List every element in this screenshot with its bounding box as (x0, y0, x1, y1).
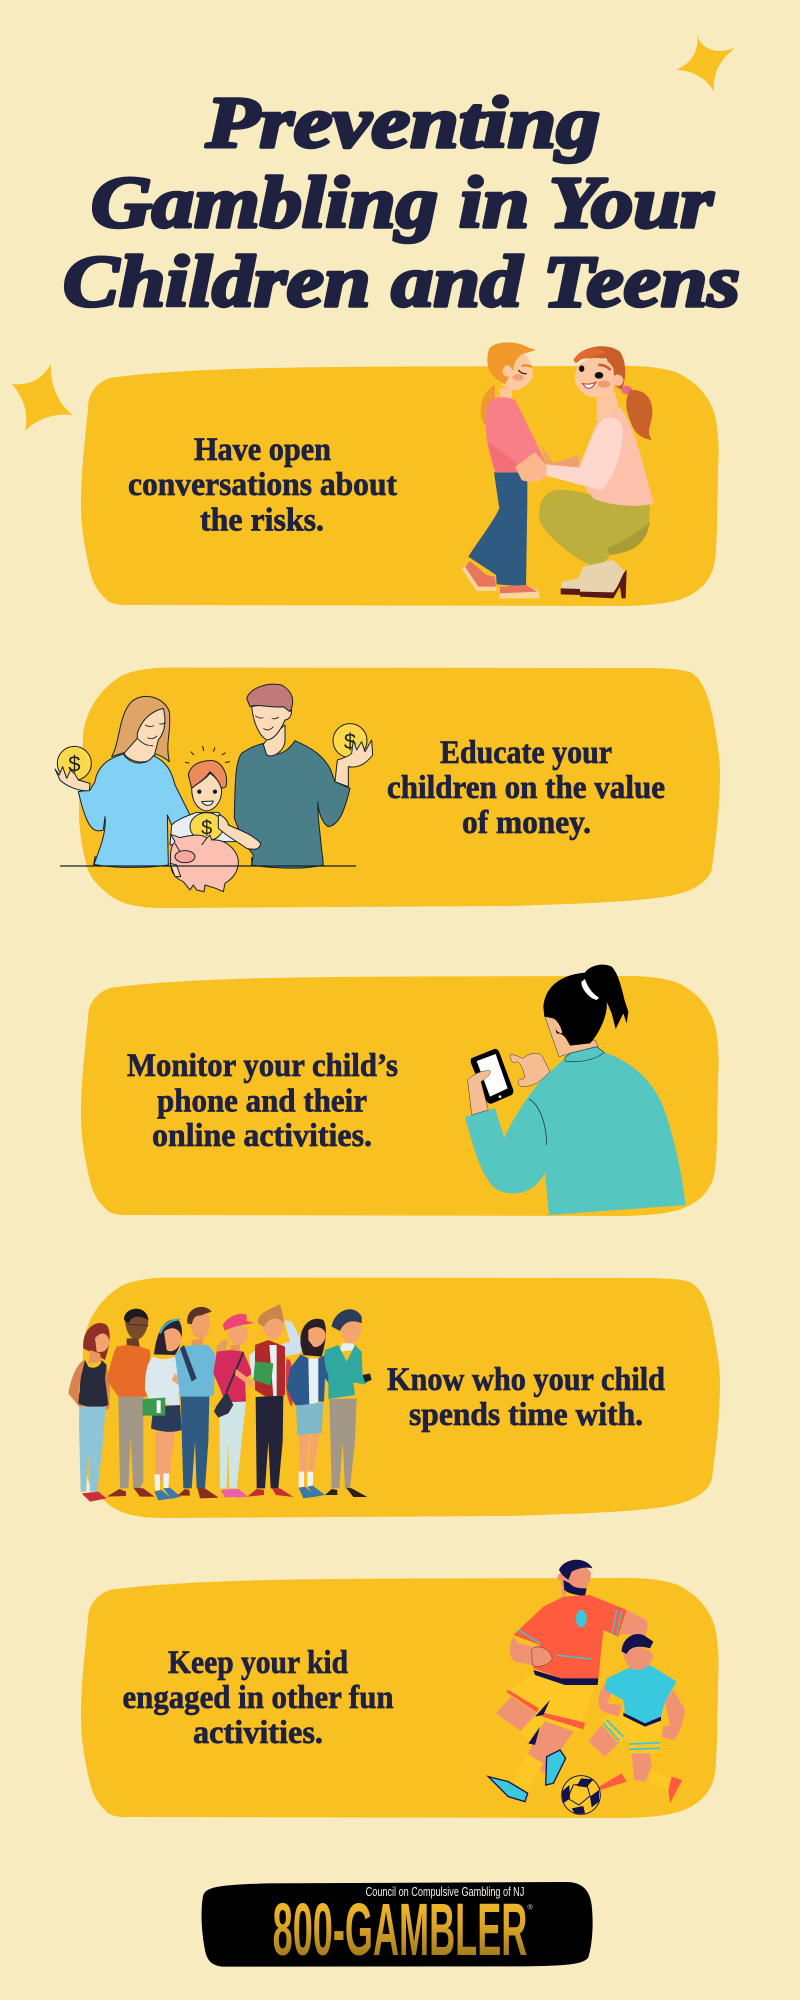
panel: other fun activities (81, 1560, 719, 1818)
text: monitor your child's phone (127, 1048, 398, 1154)
title (63, 82, 740, 322)
text: educate your children: children on the value (387, 770, 665, 806)
text: have open conversations: conversations about (128, 467, 397, 503)
title: Children and Teens (63, 241, 740, 322)
panel background (81, 976, 719, 1216)
panel background (81, 1578, 719, 1818)
text: know who your child: spends time with. (409, 1397, 643, 1433)
panel background (79, 1278, 720, 1518)
text: keep your kid engaged: activities. (193, 1715, 323, 1751)
icon: sparkle star left (12, 364, 73, 431)
text: know who your child: Know who your child (387, 1362, 665, 1398)
text: know who your child (387, 1362, 665, 1433)
text: monitor your child's phone: online activities. (152, 1118, 372, 1154)
panel background (79, 668, 720, 908)
text: keep your kid engaged: Keep your kid (168, 1645, 348, 1681)
text: keep your kid engaged (122, 1645, 394, 1751)
logo tagline: Council on Compulsive Gambling of NJ (366, 1885, 524, 1899)
illustration: mother and daughter (462, 342, 654, 598)
logo: 800-GAMBLER (202, 1882, 593, 1971)
text: educate your children: of money. (462, 805, 591, 841)
illustration: family with piggy bank: $ (201, 817, 212, 839)
text: educate your children (387, 735, 665, 841)
panel background (81, 366, 719, 606)
illustration: family with piggy bank: $ (68, 752, 80, 777)
text: have open conversations: the risks. (200, 502, 324, 538)
panel: know who your child spends time with (68, 1278, 720, 1518)
panel: monitor phone (81, 965, 719, 1216)
illustration: person using phone (465, 965, 686, 1215)
registered mark: ® (527, 1902, 533, 1911)
text: monitor your child's phone: Monitor your child’s (127, 1048, 398, 1084)
logo background (202, 1882, 593, 1967)
text: keep your kid engaged: engaged in other fun (122, 1680, 394, 1716)
title: Preventing (205, 82, 600, 163)
illustration: group of teens (68, 1304, 372, 1502)
text: educate your children: Educate your (440, 735, 612, 771)
panel: open conversations (81, 342, 719, 606)
text: have open conversations: Have open (194, 432, 331, 468)
title: Gambling in Your (91, 162, 714, 243)
text: monitor your child's phone: phone and their (157, 1084, 367, 1120)
panel: value of money (55, 668, 720, 908)
text: have open conversations (128, 432, 397, 538)
illustration: father and son playing soccer (488, 1560, 685, 1814)
icon: sparkle star top right (676, 33, 735, 92)
illustration: family with piggy bank: $ (344, 729, 356, 754)
logo: 800-GAMBLER: 800-GAMBLER (273, 1888, 527, 1971)
illustration: family with piggy bank (55, 684, 373, 892)
